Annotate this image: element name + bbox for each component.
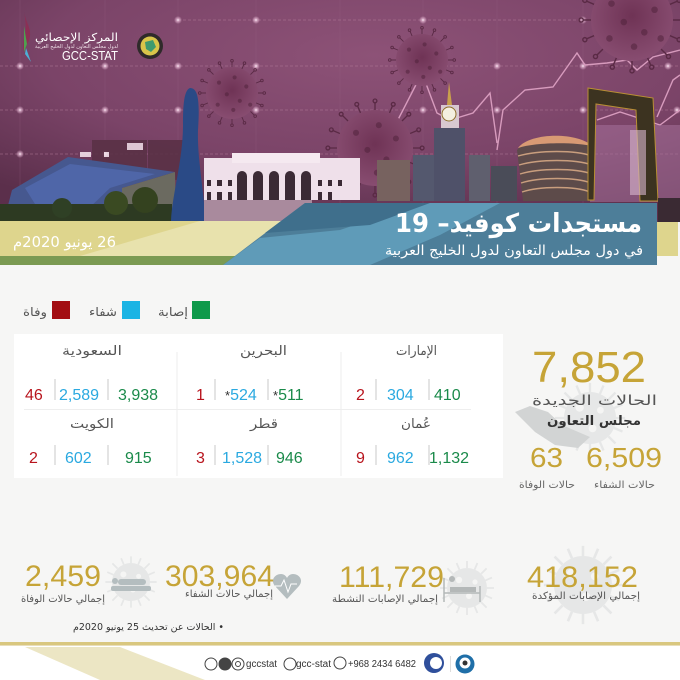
stat: total confirmed: إجمالي الإصابات المؤكدة xyxy=(532,591,640,602)
country: Saudi Arabia: 2,589 xyxy=(59,387,99,404)
country: Oman: 9 xyxy=(356,450,365,467)
stat: total deaths: إجمالي حالات الوفاة xyxy=(21,594,105,605)
country: Qatar: 946 xyxy=(276,450,303,467)
logo: GCC-STAT: GCC-STAT xyxy=(62,48,118,63)
stat: total active: 111,729 xyxy=(339,561,444,594)
date band xyxy=(0,221,678,265)
footnote: • الحالات عن تحديث 25 يونيو 2020م xyxy=(73,622,224,633)
country: Saudi Arabia xyxy=(25,344,158,404)
country: Qatar xyxy=(196,417,303,467)
country: Kuwait: 602 xyxy=(65,450,92,467)
distant towers xyxy=(80,140,188,180)
deaths number: 63 xyxy=(530,442,563,473)
stat: total confirmed xyxy=(527,546,640,624)
country: Oman: 1,132 xyxy=(429,450,469,467)
country: Bahrain: 1 xyxy=(196,387,205,404)
country: Kuwait: الكويت xyxy=(70,417,114,432)
country: Saudi Arabia: السعودية xyxy=(62,344,122,359)
handle: gcc-stat: gcc-stat xyxy=(296,659,331,670)
icon: virus and map xyxy=(515,383,625,453)
line chart xyxy=(377,50,680,160)
legend: وفاة xyxy=(23,305,47,320)
country: Oman xyxy=(356,416,469,467)
footer xyxy=(0,642,680,680)
stat: total confirmed: 418,152 xyxy=(527,561,638,594)
panel: country table xyxy=(14,334,503,478)
country: UAE: الإمارات xyxy=(396,344,437,359)
new cases number: 7,852 xyxy=(532,343,646,392)
logo: GCC-STAT: لدول مجلس التعاون لدول الخليج العربية xyxy=(35,44,118,50)
title: مستجدات كوفيد– 19 xyxy=(395,209,642,239)
country: Kuwait: 915 xyxy=(125,450,152,467)
stat: total deaths: 2,459 xyxy=(25,560,101,593)
building: Oman palace xyxy=(204,153,360,221)
country: Kuwait: 2 xyxy=(29,450,38,467)
hero banner skyline xyxy=(0,0,680,222)
country: Qatar: 3 xyxy=(196,450,205,467)
building: round tower xyxy=(517,136,592,201)
logo: GCC emblem xyxy=(137,33,163,59)
country: Bahrain: *511 xyxy=(273,387,304,404)
country: UAE: 410 xyxy=(434,387,461,404)
virus: centre xyxy=(388,26,456,94)
country: Oman: 962 xyxy=(387,450,414,467)
subtitle: في دول مجلس التعاون لدول الخليج العربية xyxy=(385,243,643,259)
new cases label: الحالات الجديدة xyxy=(532,393,657,409)
social icons xyxy=(205,657,346,670)
title panel xyxy=(223,203,657,265)
country: Bahrain xyxy=(196,344,304,404)
country: Saudi Arabia: 46 xyxy=(25,387,43,404)
recoveries number: 6,509 xyxy=(586,442,662,473)
country: Oman: عُمان xyxy=(401,416,431,432)
recoveries label: حالات الشفاء xyxy=(594,480,655,491)
country: Kuwait xyxy=(29,417,152,467)
country: Saudi Arabia: 3,938 xyxy=(118,387,158,404)
virus: centre-left xyxy=(198,59,266,127)
building: Kuwait mesh xyxy=(0,157,176,221)
deaths label: حالات الوفاة xyxy=(519,480,575,491)
panel: new cases GCC xyxy=(515,343,662,491)
stat: total active xyxy=(332,561,494,615)
logo: TÜV badge xyxy=(456,654,474,674)
logo: GCC-STAT xyxy=(23,12,118,63)
country: UAE: 304 xyxy=(387,387,414,404)
building: Qatar torch tower xyxy=(171,88,205,221)
date text: 26 يونيو 2020م xyxy=(13,233,116,251)
country: UAE xyxy=(356,344,461,404)
handle: gccstat: gccstat xyxy=(246,659,277,670)
stat: total recovered xyxy=(165,560,301,600)
logo text: المركز الإحصائي xyxy=(35,31,118,44)
country: UAE: 2 xyxy=(356,387,365,404)
building: Makkah clock tower xyxy=(377,82,517,201)
logo: quality mark xyxy=(424,653,451,673)
GCC label: مجلس التعاون xyxy=(547,414,641,429)
building: Dubai frame xyxy=(588,88,680,222)
legend: إصابة xyxy=(158,305,188,319)
country: Qatar: قطر xyxy=(249,417,278,432)
phone number: +968 2434 6482 xyxy=(348,659,416,670)
stat: total recovered: إجمالي حالات الشفاء xyxy=(185,589,273,600)
virus: lower centre xyxy=(326,99,424,197)
stat: total recovered: 303,964 xyxy=(165,560,274,593)
country: Bahrain: *524 xyxy=(225,387,257,404)
virus: top right xyxy=(579,0,680,73)
legend: شفاء xyxy=(89,305,117,319)
stat: total active: إجمالي الإصابات النشطة xyxy=(332,594,438,605)
country: Qatar: 1,528 xyxy=(222,450,262,467)
stat: total deaths xyxy=(21,556,157,608)
legend xyxy=(23,301,210,320)
country: Bahrain: البحرين xyxy=(240,344,287,359)
